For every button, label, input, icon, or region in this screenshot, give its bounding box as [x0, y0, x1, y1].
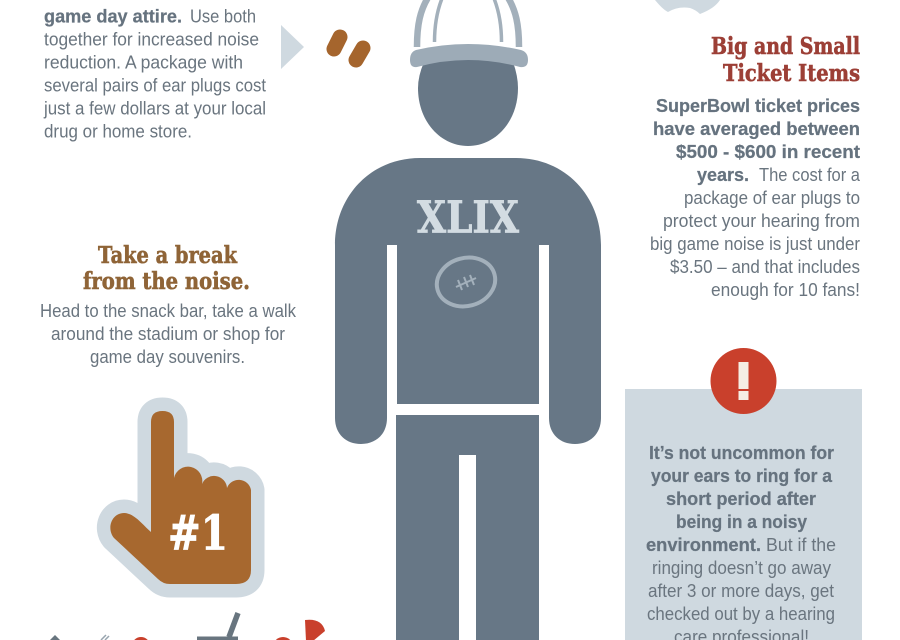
text block: ticket prices: big game noise is just under — [650, 233, 860, 254]
text block: take a break: around the stadium or shop for — [51, 323, 285, 344]
text block: ear plugs advice: just a few dollars at your local — [43, 98, 266, 118]
icon: football — [431, 251, 501, 313]
icon: number one foam finger — [110, 411, 251, 584]
panel: ringing ears callout — [625, 348, 862, 640]
text block: ear plugs advice — [43, 6, 266, 142]
heading: take a break — [83, 242, 250, 295]
callout text: ringing doesn’t go away — [652, 557, 832, 578]
callout text: environment. — [646, 534, 761, 555]
heading: big and small ticket items: Ticket Items — [723, 60, 860, 87]
heading: take a break: from the noise. — [83, 268, 250, 295]
text block: take a break: game day souvenirs. — [90, 346, 245, 367]
callout text: your ears to ring for a — [651, 465, 833, 486]
callout text: short period after — [666, 488, 816, 509]
text block: ticket prices: protect your hearing from — [663, 210, 860, 231]
text block: take a break: Head to the snack bar, take a walk — [40, 300, 297, 321]
text block: ear plugs advice: together for increased noise — [44, 28, 259, 50]
text block: ear plugs advice: game day attire. — [44, 6, 182, 26]
icon: cap crown stripes — [417, 0, 519, 47]
shirt text: XLIX — [417, 192, 520, 244]
text block: ear plugs advice: several pairs of ear plugs cost — [44, 74, 266, 96]
icon: red pennant — [305, 620, 325, 640]
icon: drink cup and straw — [197, 613, 238, 640]
icon: exclamation mark — [710, 348, 776, 414]
callout text: checked out by a hearing — [647, 603, 835, 624]
text block: ticket prices — [650, 95, 861, 300]
text block: ticket prices: enough for 10 fans! — [711, 279, 860, 300]
callout text — [646, 442, 836, 640]
text block: ticket prices: The cost for a — [759, 164, 861, 185]
icon: ear plugs — [334, 37, 363, 60]
callout text: after 3 or more days, get — [648, 580, 834, 601]
text block: ticket prices: package of ear plugs to — [684, 187, 860, 208]
callout text: But if the — [766, 534, 836, 555]
callout text: being in a noisy — [676, 511, 808, 532]
torso and arms — [335, 158, 601, 444]
text block: take a break — [40, 300, 297, 367]
figure: fan in cap and XLIX shirt — [335, 0, 601, 640]
heading: big and small ticket items: Big and Small — [711, 33, 860, 60]
callout text: It’s not uncommon for — [649, 442, 834, 463]
icon: cap brim — [410, 44, 528, 67]
icon: speech bubble fragment — [655, 0, 720, 14]
text block: ticket prices: have averaged between — [653, 118, 860, 139]
heading: big and small ticket items — [711, 33, 860, 87]
text block: ear plugs advice: reduction. A package with — [44, 52, 243, 72]
text block: ticket prices: $500 - $600 in recent — [676, 141, 860, 162]
text block: ear plugs advice: Use both — [190, 6, 256, 26]
text block: ticket prices: SuperBowl ticket prices — [656, 95, 860, 116]
arrow: pointing to ear plugs — [281, 25, 304, 69]
text block: ticket prices: years. — [697, 164, 749, 185]
icons: cropped snack and souvenir row — [50, 613, 325, 640]
head — [418, 56, 518, 146]
text block: ear plugs advice: drug or home store. — [44, 120, 192, 142]
legs — [396, 415, 539, 640]
text block: ticket prices: $3.50 – and that includes — [670, 256, 860, 277]
heading: take a break: Take a break — [98, 242, 238, 269]
icon: number one foam finger: #1 — [168, 506, 228, 562]
